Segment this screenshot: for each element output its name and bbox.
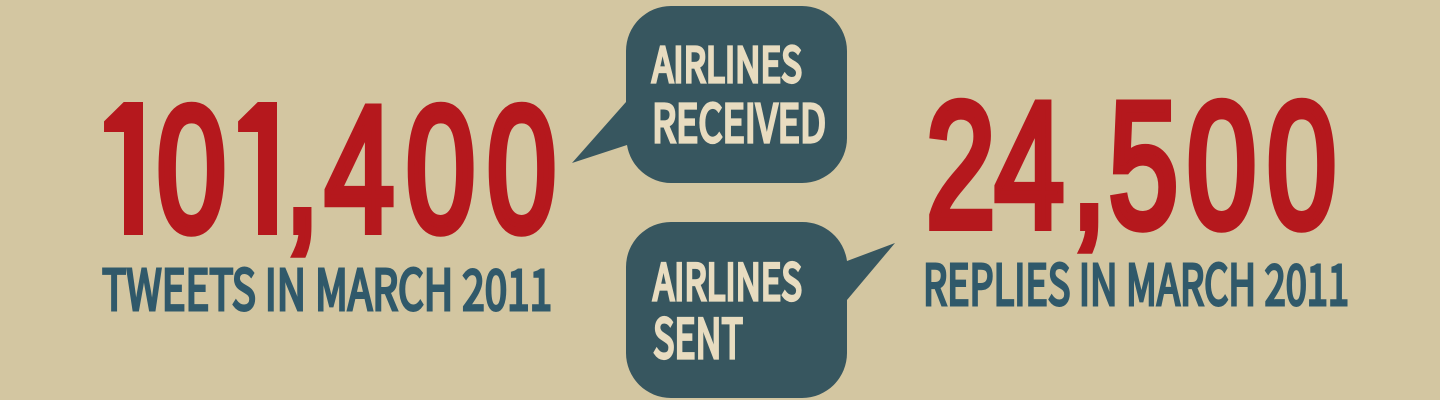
speech bubble: airlines sent: [626, 222, 895, 398]
stat: tweets received number: 1: [101, 69, 170, 269]
stat: tweets received number: 1: [235, 69, 304, 269]
stat: replies sent number: 24,500: [926, 65, 1336, 265]
label: tweets in March 2011: TWEETS IN MARCH 2011: [102, 246, 552, 327]
bubble text: sent: SENT: [653, 295, 743, 374]
bubble text: airlines: AIRLINES: [652, 26, 802, 96]
bubble text: received: RECEIVED: [652, 82, 826, 157]
bubble text: airlines: AIRLINES: [653, 243, 802, 315]
speech bubble: airlines received: [572, 6, 847, 183]
stat: tweets received number: 0,400: [157, 69, 556, 269]
